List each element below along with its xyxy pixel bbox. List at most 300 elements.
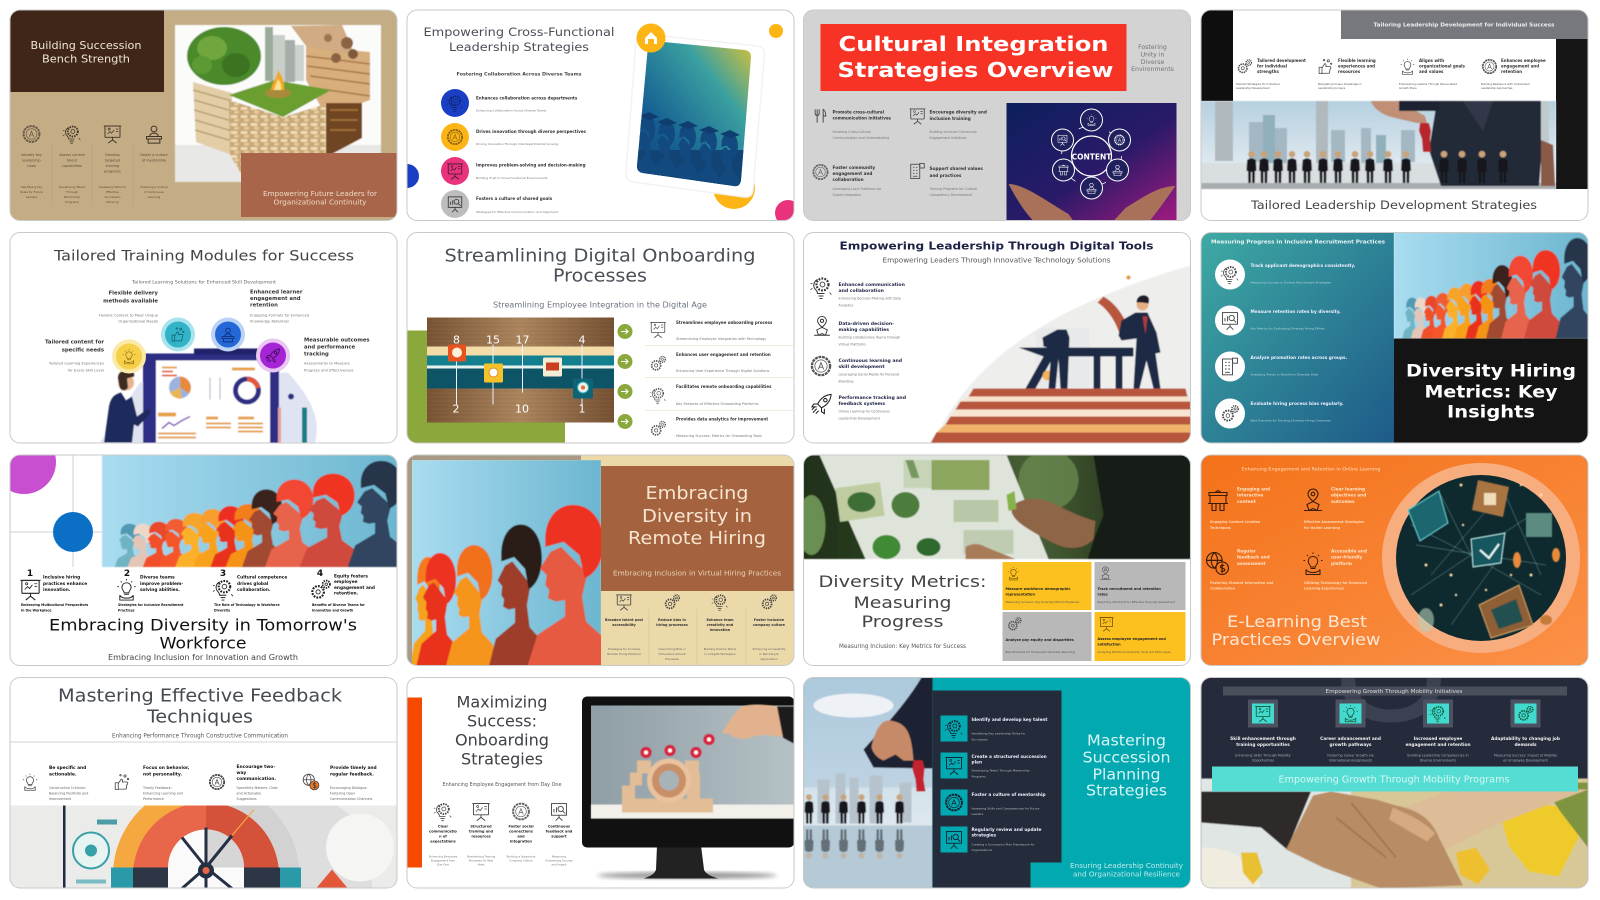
metric grid: Best Practices for Transparent Diversity Reporting (1006, 650, 1075, 654)
list: Key Metrics for Evaluating Diversity Hiring Efforts (1250, 326, 1325, 330)
four columns (429, 804, 573, 866)
subtitle panel (241, 153, 397, 217)
four columns: Clear (438, 824, 448, 828)
feature callouts: Flexible delivery (109, 290, 159, 296)
four tips: Provide timely and (330, 765, 377, 771)
four columns: Enhancing Accessibility (753, 647, 786, 651)
learning items: Clear learning (1331, 486, 1365, 492)
four columns: Structured (470, 824, 492, 828)
title (818, 572, 986, 631)
four items: Tailored Strategies for Individual (1235, 82, 1280, 86)
title: Embracing Diversity in Tomorrow's (49, 616, 357, 634)
icons and text: Roles for Future (20, 190, 43, 194)
four numbered items: Embracing Multicultural Perspectives (21, 603, 88, 607)
four icon tiles: Adaptability to changing job (1491, 736, 1560, 742)
card: Diversity Hiring Metrics (1201, 232, 1595, 444)
list items: Building Trust in Cross-Functional Environments (476, 176, 548, 180)
dark list panel: plan (972, 760, 982, 766)
four columns: feedback and (546, 830, 573, 834)
learning items: objectives and (1331, 492, 1366, 498)
metric grid: Reporting Standards for Effective Diversity Assessment (1098, 600, 1176, 604)
image: close heads (410, 460, 611, 668)
black title panel (1394, 338, 1588, 444)
title (49, 616, 357, 652)
four numbered items: improve problem- (140, 581, 183, 587)
four columns: hiring processes (656, 623, 688, 627)
feature list: Performance tracking and (838, 395, 906, 401)
learning items: Fostering Student Interaction and (1210, 581, 1274, 585)
four items: Leadership Development (1236, 86, 1270, 90)
list: Track applicant demographics consistently. (1250, 263, 1356, 269)
four numbered items: Innovation and Growth (312, 608, 354, 612)
item: diversity training: Engagement Initiatives (930, 136, 967, 140)
item: cross-cultural communication: Fostering Cross-Cultural (832, 130, 871, 134)
title panel: Embracing (646, 483, 748, 504)
card: Empowering Leadership Through Digital Tools (804, 232, 1190, 444)
icons and text (20, 126, 168, 204)
four tips: Communication Channels (330, 797, 373, 801)
icons and text: roles (27, 164, 36, 168)
learning items: Utilizing Technology for Enhanced (1304, 581, 1368, 585)
subtitle: Diverse (1141, 59, 1164, 66)
list items: Fosters a culture of shared goals (476, 196, 553, 201)
card: Mastering Succession Planning (804, 678, 1190, 888)
icons and text: Identify key (21, 153, 42, 157)
learning items: content (1237, 499, 1256, 505)
image: timeline on wood: 4 (578, 334, 586, 346)
four columns: Strategies for Inclusive (608, 647, 640, 651)
dark list panel (932, 690, 1062, 888)
title banner (820, 24, 1126, 91)
four numbered items: employee (334, 579, 358, 585)
feature callouts: retention (250, 302, 278, 308)
feature callouts: engagement and (250, 296, 301, 302)
feature callouts: for Every Skill Level (68, 368, 104, 372)
card: Maximizing Success Onboarding (407, 678, 794, 888)
card: Diversity Metrics Measuring Progress (798, 450, 1190, 666)
four columns: Building a Supportive (507, 854, 536, 858)
four items: Leadership Approaches (1481, 86, 1513, 90)
four columns: Foster inclusive (754, 618, 785, 622)
four columns: in a Digital Workspace (704, 652, 736, 656)
four icon tiles: Fostering Career Growth via (1327, 754, 1374, 758)
four columns: training and (469, 830, 494, 834)
monitor with hand and blocks (582, 696, 794, 879)
four items: strengths (1257, 69, 1279, 74)
feature list: Virtual Platforms (838, 342, 866, 346)
four columns: Continuous (548, 824, 570, 828)
four rows: Measuring Success: Metrics for Onboarding Tools (676, 434, 762, 438)
item: community engagement: Global Integration (832, 193, 861, 197)
list: Best Practices for Tracking Diversity Hiring Outcomes (1250, 418, 1331, 422)
image: row of heads (1394, 232, 1595, 338)
learning items: Regular (1237, 548, 1257, 554)
card: Embracing Diversity in Remote Hiring (407, 455, 794, 668)
four icon tiles: Increased employee (1414, 736, 1462, 742)
list: Analyzing Trends in Workforce Diversity Data (1250, 372, 1318, 376)
item: shared values: Training Programs for Cultural (928, 187, 977, 191)
four numbered items: Equity fosters (334, 574, 368, 580)
item: shared values: Support shared values (930, 166, 983, 171)
image: timeline on wood: 17 (516, 334, 530, 346)
dark list panel: Identify and develop key talent (972, 717, 1047, 723)
four columns: Remote Hiring Practices (607, 652, 641, 656)
icons and text: talent (67, 158, 78, 162)
four numbered items: drives global (237, 581, 269, 587)
metric grid: Analyze pay equity and disparities (1006, 638, 1074, 642)
illustration: gauge (10, 806, 397, 888)
four numbered items: 2 (124, 569, 130, 579)
black bands (1201, 10, 1588, 189)
geometric decoration (0, 430, 102, 567)
metric grid: rates (1098, 592, 1108, 596)
learning items: for Online Learning (1304, 526, 1341, 530)
four tips (23, 764, 377, 801)
header bar (1341, 10, 1588, 39)
icons and text: programs (104, 170, 121, 174)
four icon tiles: Skill enhancement through (1230, 736, 1296, 742)
dark list panel: Developing Talent Through Mentorship (972, 768, 1030, 772)
dark list panel: Create a structured succession (972, 754, 1047, 760)
title panel: Remote Hiring (628, 528, 766, 549)
image: figures and skyline (1201, 101, 1556, 189)
title: Succession (1082, 750, 1170, 766)
feature callouts (45, 290, 370, 372)
dark list panel: Creating a Succession Plan Framework for (972, 842, 1035, 846)
item: diversity training: inclusion training (930, 116, 971, 121)
four columns: creativity and (707, 623, 734, 627)
feature list: Continuous learning and (838, 358, 902, 364)
four columns: communicatio (429, 830, 457, 834)
four tips: Encourage two- (236, 764, 275, 770)
dark list panel: Regularly review and update (972, 827, 1042, 833)
four icon tiles (1230, 700, 1560, 762)
four icon tiles: Opportunities (1252, 758, 1275, 762)
title panel: Building Succession (30, 40, 142, 52)
four tips: Specificity Matters: Clear (236, 786, 279, 790)
feature callouts: Engaging Formats for Enhanced (250, 314, 309, 318)
learning items: platform (1331, 561, 1352, 567)
learning items: assessment (1237, 561, 1266, 567)
dark list panel: Identifying Key Leadership Roles for (972, 732, 1026, 736)
image: figures with hand (804, 678, 932, 888)
icons and text: Identifying Key (21, 185, 43, 189)
title: Workforce (160, 634, 246, 652)
divider (10, 741, 397, 743)
four numbered items: Diversity (214, 608, 231, 612)
four icon tiles: Diverse Environments (1420, 758, 1456, 762)
feature list: Enhanced communication (838, 282, 905, 288)
icons and text: Programs (65, 200, 79, 204)
dark list panel: strategies (972, 832, 997, 838)
icons and text: of Continuous (144, 190, 165, 194)
icons and text: Planning (106, 200, 119, 204)
card: Cultural Integration Strategies Overview (804, 10, 1190, 221)
four tips: Focus on behavior, (143, 765, 189, 771)
icons and text: Assessing Skills for (99, 185, 127, 189)
title: Streamlining Digital Onboarding (444, 246, 756, 266)
icons and text: Succession (104, 195, 121, 199)
four icon tiles: growth pathways (1330, 742, 1372, 748)
image: timeline on wood: 8 (453, 334, 460, 346)
four columns: Virtual Recruitment (658, 652, 687, 656)
four items: Growth Plans (1399, 86, 1417, 90)
title: Planning (1092, 766, 1160, 784)
four tips: communication. (236, 776, 276, 782)
card: Building Succession Bench Strength (10, 10, 397, 221)
icons and text: Developing Talent (59, 185, 86, 189)
panel heading: Measuring Progress in Inclusive Recruitment Practices (1211, 240, 1385, 246)
learning items: Effective Assessment Strategies (1304, 520, 1364, 524)
four columns: expectations (430, 840, 456, 844)
four columns (605, 595, 786, 666)
four columns: innovation (710, 628, 731, 632)
icons and text: Leaders (26, 195, 38, 199)
four columns: Processes (665, 657, 679, 661)
icons and text: Develop (105, 153, 120, 157)
feature callouts: Organizational Needs (118, 320, 158, 324)
four columns: accessibility (612, 623, 637, 627)
learning items (1207, 486, 1368, 590)
column dividers (52, 144, 133, 205)
item: shared values: Competency Development (930, 193, 973, 197)
icons and text: Learning (148, 195, 160, 199)
four numbered items: The Role of Technology in Workforce (214, 603, 280, 607)
four numbered items: Practices (118, 608, 135, 612)
four columns: connections (509, 830, 533, 834)
four numbered items: innovation. (43, 587, 71, 593)
learning items: user-friendly (1331, 554, 1362, 560)
subtitle (1131, 44, 1174, 73)
list: Evaluate hiring process bias regularly. (1250, 401, 1344, 407)
card: Mastering Effective Feedback (10, 678, 397, 888)
black title panel: Insights (1447, 402, 1535, 422)
title panel (601, 466, 794, 591)
green arrow buttons (618, 324, 632, 429)
four numbered items: Benefits of Diverse Teams for (312, 603, 365, 607)
subtitle (1070, 862, 1183, 878)
title: Progress (862, 612, 944, 631)
subtitle: Streamlining Employee Integration in the Digital Age (493, 300, 707, 310)
four columns: Building Diverse Teams (704, 647, 737, 651)
item: cross-cultural communication: Communication and Understanding (832, 136, 889, 140)
green block (407, 330, 565, 444)
learning items: Learning Experiences (1304, 586, 1344, 590)
left gradient panel (1201, 232, 1394, 444)
four tips: Encouraging Dialogue: (330, 786, 367, 790)
list items: Strategies for Effective Communication and Alignment (476, 210, 559, 214)
four columns: and Impact (551, 862, 567, 866)
four tips: Enhancing Learning and (143, 792, 183, 796)
image: timeline on wood: 10 (515, 402, 529, 416)
feature list: and collaboration (838, 288, 884, 294)
decorative shapes (395, 24, 801, 226)
ring icons (114, 320, 288, 372)
four tips: Balancing Positivity and (49, 792, 88, 796)
subtitle: Embracing Inclusion for Innovation and Growth (108, 653, 298, 662)
card: E-Learning Best Practices (1201, 455, 1588, 666)
four columns: Foster social (508, 824, 534, 828)
four numbered items: retention. (334, 590, 359, 596)
four columns: Overcoming Bias in (658, 647, 686, 651)
four items: for individual (1257, 64, 1288, 68)
icons and text: leadership (22, 158, 41, 162)
dark list panel: Organizations (972, 848, 993, 852)
feature callouts: Progress and Effectiveness (304, 368, 354, 372)
title panel: Diversity in (642, 506, 752, 527)
four items: experiences and (1338, 64, 1375, 68)
four items: Tailored development (1257, 58, 1306, 63)
four items (1235, 58, 1546, 90)
illustration: presenter with board (100, 348, 317, 444)
four icon tiles: on Employee Development (1503, 758, 1549, 762)
metric grid: Assess employee engagement and (1098, 637, 1166, 641)
title: Measuring (854, 593, 952, 612)
four items: engagement and (1501, 64, 1539, 68)
title: Empowering Leadership Through Digital Tools (840, 240, 1154, 252)
image: content cycle: CONTENT (1072, 152, 1112, 162)
illustration: leaders on stairs (930, 266, 1190, 444)
image: row of heads (102, 455, 408, 567)
feature callouts: Tailored Learning Experiences (48, 362, 104, 366)
feature list: making capabilities (838, 327, 889, 333)
icons and text: training (106, 164, 119, 168)
title: Processes (553, 266, 647, 286)
four items: resources (1338, 69, 1361, 74)
learning items: Engaging and (1237, 486, 1270, 492)
accent bar (407, 698, 422, 868)
four tips: regular feedback. (330, 772, 374, 778)
feature callouts: Tailored content for (45, 340, 104, 346)
title (446, 248, 754, 282)
title (58, 686, 343, 728)
card: Embracing Diversity in Tomorrow's Workforce (0, 430, 408, 666)
feature list: skill development (838, 364, 885, 370)
four columns: in Remote Job (759, 652, 779, 656)
four columns: n of (439, 834, 447, 838)
card: Empowering Cross-Functional Leadership (395, 10, 801, 226)
subtitle: Fostering (1138, 44, 1167, 51)
taupe edges (407, 455, 581, 666)
four columns: and (517, 834, 525, 838)
metric grid: Measure workforce demographic (1006, 587, 1070, 591)
list items: Drives innovation through diverse perspectives (476, 129, 587, 134)
four numbered items: collaboration. (237, 587, 271, 593)
tablet image (626, 34, 765, 197)
item: cross-cultural communication: communication initiatives (832, 116, 892, 120)
metric grid: Measuring Inclusion: Key Diversity Metrics Explained (1006, 600, 1079, 604)
title: Diversity Metrics: (818, 572, 986, 591)
four items: and values (1419, 69, 1444, 74)
four columns: resources (471, 834, 491, 838)
list items: Driving Innovation Through Interdepartmental Synergy (476, 142, 559, 146)
watermark ring (1341, 678, 1441, 722)
subtitle: Empowering Leaders Through Innovative Technology Solutions (882, 256, 1111, 264)
four tips: not personality. (143, 772, 182, 778)
learning items: Collaboration (1210, 586, 1236, 590)
item: community engagement: Foster community (832, 165, 875, 170)
feature callouts: specific needs (62, 348, 104, 354)
title (455, 692, 549, 768)
icons and text: Assess current (59, 153, 85, 157)
learning items: Accessible and (1331, 548, 1367, 554)
title panel (10, 10, 164, 92)
subtitle: Ensuring Leadership Continuity (1070, 862, 1183, 870)
four numbered items: Inclusive hiring (43, 574, 80, 580)
feature callouts: methods available (103, 298, 158, 304)
item: diversity training: Encourage diversity and (930, 110, 987, 114)
four columns: Processes for New (469, 858, 494, 862)
list: Analyze promotion rates across groups. (1250, 355, 1348, 361)
four icon tiles: engagement and retention (1405, 742, 1471, 748)
four icon tiles: demands (1514, 742, 1537, 748)
image: handshake over map (1201, 778, 1588, 888)
four columns: Broaden talent pool (605, 618, 643, 622)
four numbered items (20, 569, 375, 612)
card: Streamlining Digital Onboarding (407, 232, 794, 444)
four numbered items: engagement and (334, 585, 375, 591)
item: diversity training (910, 109, 987, 140)
list items: Improves problem-solving and decision-making (476, 162, 586, 168)
subtitle: Environments (1131, 66, 1174, 73)
four items: Flexible learning (1338, 58, 1376, 63)
subtitle: Fostering Collaboration Across Diverse Teams (456, 72, 582, 78)
header strip (1223, 686, 1567, 696)
title panel: Embracing Inclusion in Virtual Hiring Practices (613, 570, 781, 578)
feature list (810, 278, 906, 420)
four rows: Streamlining Employee Integration with Technology (676, 337, 766, 341)
title panel: Bench Strength (42, 54, 130, 66)
four items: retention (1501, 69, 1522, 74)
four tips: Fostering Open (330, 792, 355, 796)
learning items: feedback and (1237, 554, 1270, 560)
item: diversity training: Building Inclusive Community (930, 130, 977, 134)
four columns: Company Culture (509, 858, 533, 862)
four icon tiles: International Assignments (1329, 758, 1372, 762)
black title panel: Diversity Hiring (1406, 362, 1576, 382)
metric grid (1002, 562, 1186, 661)
feature list: Enhancing Decision-Making with Data (838, 296, 901, 300)
subtitle: and Organizational Resilience (1073, 870, 1180, 878)
four tips: Suggestions (236, 797, 257, 801)
four tips: and Actionable (236, 792, 261, 796)
black title panel: Metrics: Key (1424, 382, 1558, 402)
title: Onboarding (455, 730, 549, 750)
four icon tiles: Building Leadership Competencies in (1407, 754, 1469, 758)
image: timeline on wood: 1 (578, 402, 586, 416)
four tips: actionable. (49, 772, 77, 778)
four items: Building Resilience with Customized (1481, 82, 1530, 86)
feature list: feedback systems (838, 401, 885, 407)
subtitle: Enhancing Employee Engagement from Day One (442, 782, 562, 788)
four columns: Measuring (552, 854, 566, 858)
four tips: Be specific and (49, 765, 86, 771)
four columns: Onboarding Success (545, 858, 573, 862)
icons and text: targeted (105, 158, 120, 162)
header bar: Tailoring Leadership Development for Individual Success (1374, 22, 1555, 28)
metric grid: Track recruitment and retention (1098, 587, 1161, 591)
feature callouts: Knowledge Retention (250, 320, 290, 324)
four numbered items: 4 (317, 569, 323, 579)
title banner: Strategies Overview (838, 58, 1114, 82)
four rows: Streamlines employee onboarding process (676, 320, 773, 325)
four columns: Enhance team (706, 618, 734, 622)
dark list panel: Leaders (972, 812, 984, 816)
title (424, 25, 614, 54)
metric grid: Analyzing Workforce Diversity: Tools and Techniques (1098, 650, 1171, 654)
title: Empowering Cross-Functional (424, 25, 614, 39)
four numbered items: Cultural competence (237, 574, 287, 580)
